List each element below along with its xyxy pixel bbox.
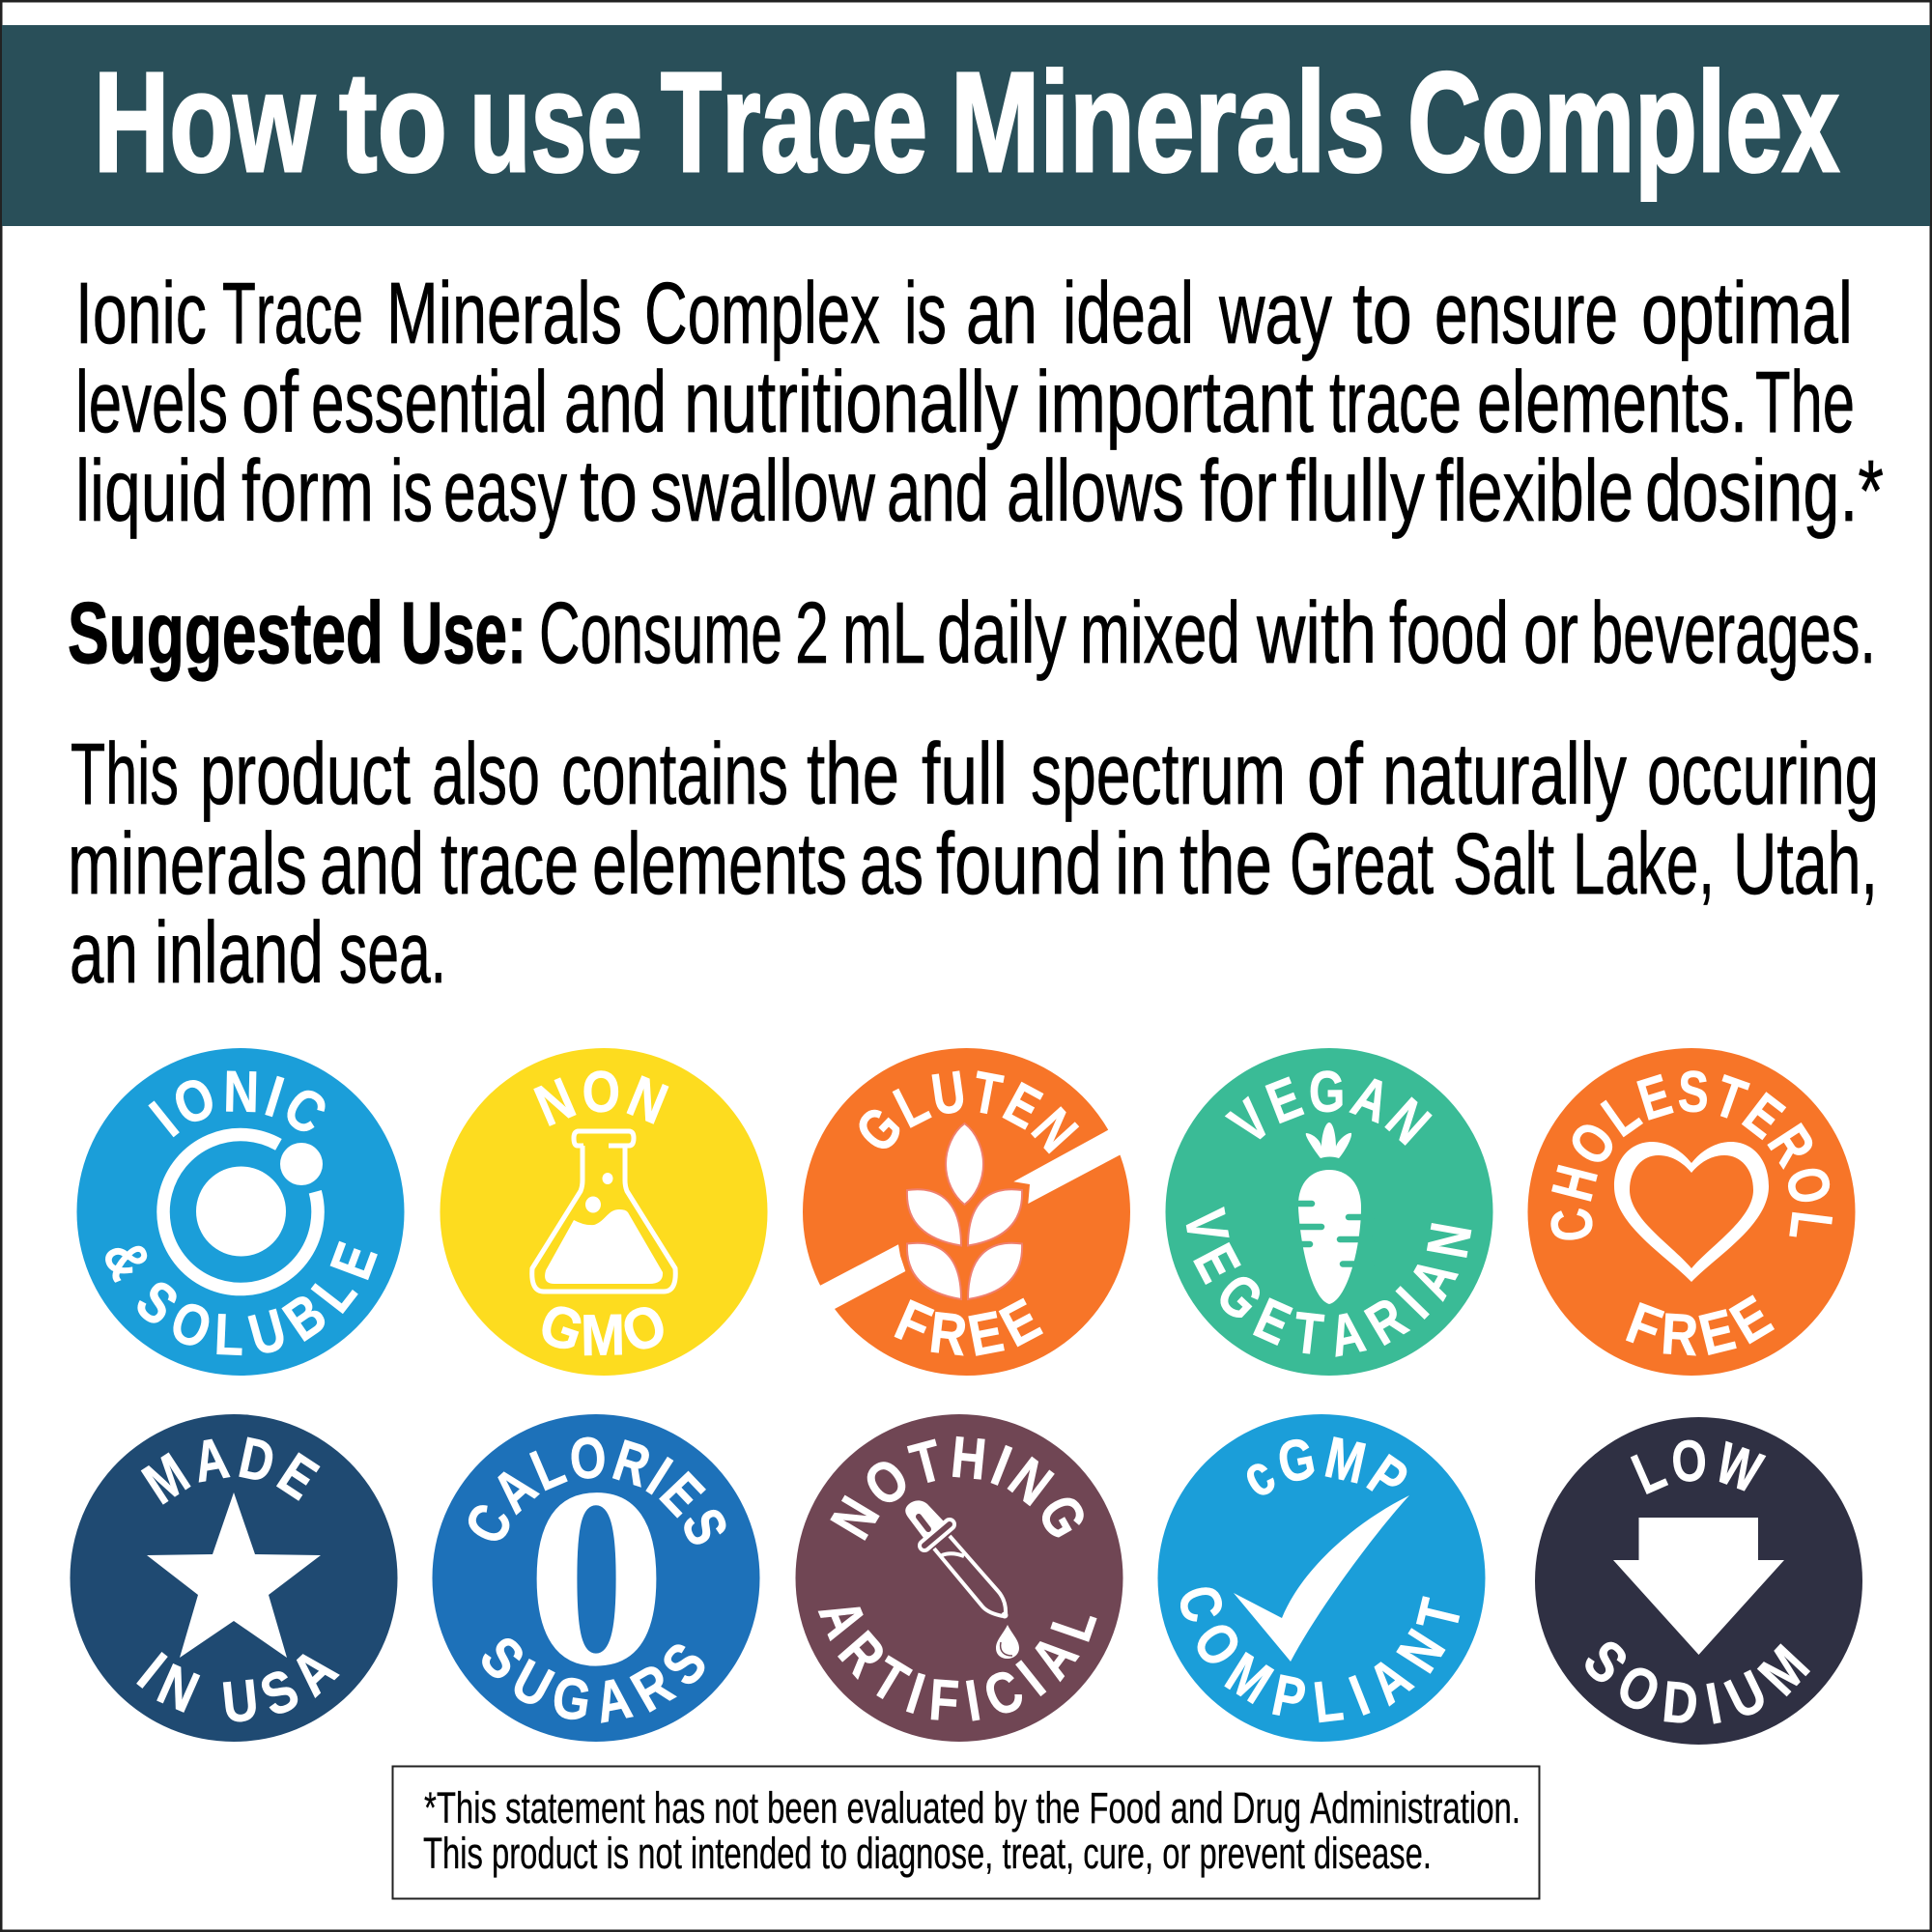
label: MADE: MADE: [141, 1437, 321, 1505]
paragraph: intro: ensure: [1435, 266, 1618, 362]
label: NOTHING: NOTHING: [830, 1435, 1084, 1541]
paragraph: intro: and: [564, 355, 667, 451]
title: to: [339, 43, 447, 202]
badge: ionic and soluble: [77, 1048, 404, 1376]
paragraph: intro: nutritionally: [684, 355, 1018, 451]
paragraph: intro: an: [966, 266, 1037, 362]
disclaimer text: [423, 1783, 1520, 1878]
paragraph: full spectrum: in: [1115, 816, 1167, 913]
paragraph: full spectrum: as: [860, 816, 923, 913]
paragraph: full spectrum: found: [936, 816, 1102, 913]
icon: check mark: [1234, 1495, 1409, 1662]
paragraph: intro: important: [1036, 355, 1314, 451]
paragraph: full spectrum: full: [922, 726, 1008, 823]
disclaimer box: [392, 1766, 1540, 1899]
paragraph: intro: ideal: [1063, 266, 1194, 362]
paragraph: intro: Ionic: [75, 266, 207, 362]
paragraph: intro: essential: [311, 355, 548, 451]
paragraph: intro: The: [1755, 355, 1855, 451]
paragraph: intro: liquid: [75, 443, 228, 540]
label: GMO: GMO: [542, 1306, 664, 1356]
paragraph: full spectrum: spectrum: [1031, 726, 1286, 823]
paragraph: full spectrum: an: [70, 905, 138, 1002]
paragraph: full spectrum: naturally: [1382, 726, 1627, 823]
badge: cholesterol free: [1528, 1048, 1855, 1376]
paragraph: intro: elements.: [1477, 355, 1747, 451]
badge: gluten free: [803, 1048, 1130, 1376]
disclaimer text: This product is not intended to diagnose, treat, cure, or prevent disease.: [423, 1829, 1432, 1878]
paragraph: intro: for: [1200, 443, 1277, 540]
label: IONIC: IONIC: [148, 1070, 325, 1138]
icon: slash band: [782, 1107, 1150, 1337]
paragraph: full spectrum: the: [1179, 816, 1272, 913]
badge: low sodium: [1535, 1417, 1862, 1745]
paragraph: intro: levels: [75, 355, 228, 451]
label: SOLUBLE: SOLUBLE: [137, 1240, 378, 1356]
paragraph: intro: flully: [1286, 443, 1425, 540]
label: ARTIFICIAL: ARTIFICIAL: [817, 1607, 1097, 1721]
suggested use line: Suggested: [68, 585, 384, 682]
paragraph: intro: and: [887, 443, 989, 540]
icon: dropper: [905, 1500, 1019, 1659]
suggested use line: Use:: [401, 585, 526, 682]
label: CALORIES: CALORIES: [468, 1437, 726, 1545]
title: use: [469, 43, 642, 202]
icon: large zero: 0: [526, 1435, 667, 1719]
paragraph: intro: Complex: [644, 266, 880, 362]
badge: cgmp compliant: [1157, 1414, 1486, 1742]
icon: heart: [1614, 1142, 1769, 1282]
paragraph: intro: way: [1218, 266, 1332, 362]
badge: vegan vegetarian: [1165, 1048, 1493, 1376]
label: LOW: LOW: [1631, 1439, 1766, 1494]
paragraph: full spectrum: elements: [592, 816, 847, 913]
paragraph: full spectrum: the: [807, 726, 899, 823]
paragraph: full spectrum: This: [71, 726, 179, 823]
paragraph: intro: is: [904, 266, 947, 362]
paragraph: full spectrum: Salt: [1453, 816, 1554, 913]
label: NON: NON: [533, 1070, 668, 1126]
suggested use line: mixed: [1080, 585, 1240, 682]
paragraph: intro: trace: [1329, 355, 1462, 451]
paragraph: intro: is: [390, 443, 433, 540]
paragraph: intro: allows: [1007, 443, 1184, 540]
icon: ion ring: [163, 1135, 323, 1290]
badge: zero calories zero sugars: [433, 1414, 759, 1742]
label: SUGARS: SUGARS: [482, 1638, 705, 1723]
icon: flask: [532, 1131, 675, 1292]
label: VEGETARIAN: VEGETARIAN: [1186, 1207, 1472, 1357]
title: How: [94, 43, 315, 202]
paragraph: full spectrum: also: [432, 726, 540, 823]
paragraph: full spectrum: of: [1307, 726, 1364, 823]
label: COMPLIANT: COMPLIANT: [1180, 1587, 1461, 1723]
suggested use line: daily: [937, 585, 1066, 682]
paragraph: intro: optimal: [1641, 266, 1853, 362]
label: SODIUM: SODIUM: [1585, 1642, 1810, 1724]
paragraph: full spectrum: trace: [440, 816, 579, 913]
suggested use line: mL: [842, 585, 925, 682]
paragraph: intro: to: [1352, 266, 1412, 362]
paragraph: intro: flexible: [1435, 443, 1634, 540]
label: FREE: FREE: [1626, 1294, 1775, 1356]
label: ampersand: &: [105, 1246, 147, 1283]
icon: star: [147, 1492, 321, 1658]
icon: carrot: [1290, 1122, 1372, 1304]
paragraph: full spectrum: minerals: [68, 816, 307, 913]
badge: non gmo: [440, 1048, 767, 1376]
title: Minerals: [951, 43, 1385, 202]
suggested use line: or: [1523, 585, 1578, 682]
paragraph: intro: of: [242, 355, 299, 451]
label: VEGAN: VEGAN: [1225, 1070, 1433, 1146]
paragraph: full spectrum: [68, 726, 1879, 1002]
suggested use line: 2: [795, 585, 829, 682]
paragraph: intro: to: [580, 443, 638, 540]
paragraph: intro: Minerals: [386, 266, 622, 362]
paragraph: full spectrum: Great: [1290, 816, 1434, 913]
icon: down arrow: [1613, 1518, 1784, 1655]
title: Trace: [661, 43, 927, 202]
paragraph: intro: form: [242, 443, 374, 540]
paragraph: full spectrum: inland: [155, 905, 324, 1002]
label: GLUTEN: GLUTEN: [860, 1070, 1080, 1153]
label: CHOLESTEROL: CHOLESTEROL: [1550, 1070, 1833, 1240]
header band with title: [2, 25, 1930, 226]
paragraph: full spectrum: contains: [561, 726, 788, 823]
suggested use line: Consume: [539, 585, 782, 682]
label: IN USA: IN USA: [136, 1652, 340, 1721]
icon: wheat: [907, 1123, 1022, 1299]
paragraph: full spectrum: Lake,: [1573, 816, 1715, 913]
badge: nothing artificial: [796, 1414, 1122, 1742]
paragraph: full spectrum: and: [320, 816, 424, 913]
suggested use line: with: [1256, 585, 1377, 682]
disclaimer text: *This statement has not been evaluated by the Food and Drug Administration.: [424, 1783, 1520, 1833]
suggested use line: food: [1389, 585, 1509, 682]
paragraph: full spectrum: sea.: [339, 905, 446, 1002]
label: FREE: FREE: [895, 1298, 1043, 1356]
paragraph: full spectrum: product: [200, 726, 411, 823]
badge: made in usa: [70, 1414, 398, 1742]
paragraph: intro: easy: [443, 443, 567, 540]
paragraph: intro: [75, 266, 1884, 540]
paragraph: intro: Trace: [222, 266, 363, 362]
label: cGMP: cGMP: [1247, 1436, 1406, 1495]
paragraph: intro: swallow: [650, 443, 876, 540]
